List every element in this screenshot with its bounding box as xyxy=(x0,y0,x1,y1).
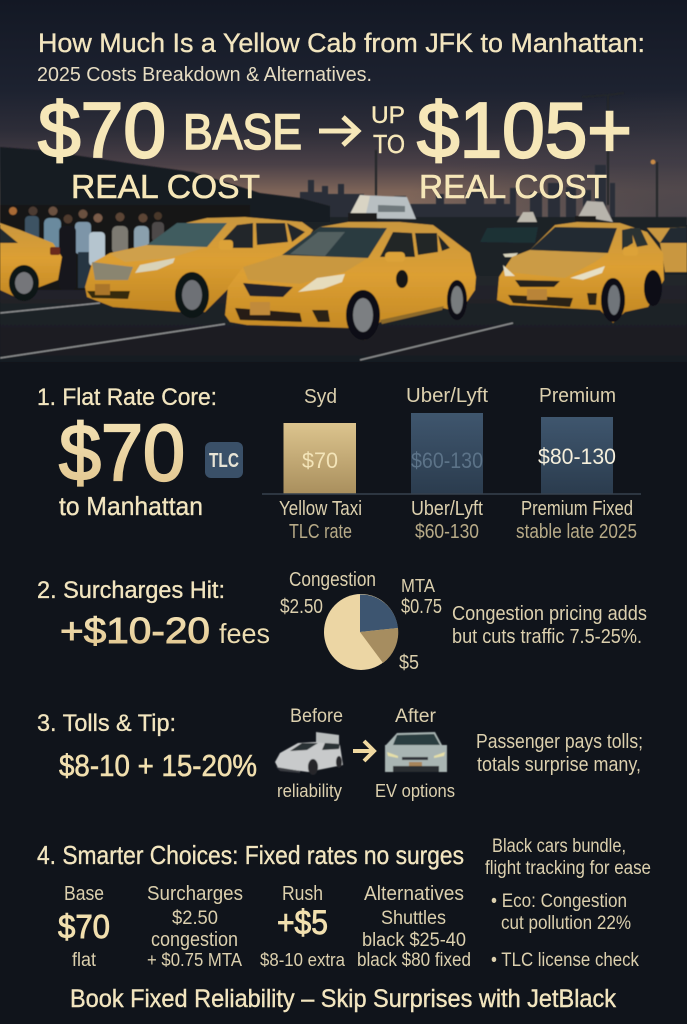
base price: $70 xyxy=(38,86,166,174)
toll amount: $8-10 + 15-20% xyxy=(59,748,257,783)
column: alternatives: Alternatives xyxy=(364,883,464,905)
real cost right: REAL COST xyxy=(419,168,607,205)
ground behind cars xyxy=(0,217,687,277)
main title: How Much Is a Yellow Cab from JFK to Manhattan: xyxy=(38,28,645,58)
column: base: Base xyxy=(64,883,104,905)
column captions: Premium Fixed xyxy=(521,498,633,520)
footer call to action: Book Fixed Reliability – Skip Surprises with JetBlack xyxy=(70,985,616,1013)
bar values xyxy=(302,444,616,473)
column: rush: Rush xyxy=(282,883,323,905)
congestion note: Congestion pricing adds xyxy=(452,603,647,625)
column captions: Yellow Taxi xyxy=(279,498,362,520)
pie chart xyxy=(324,594,398,670)
pie labels xyxy=(280,569,442,674)
column: rush xyxy=(260,883,346,970)
icon: front view car xyxy=(385,732,447,772)
arrow before to after xyxy=(353,741,374,761)
before after labels: After xyxy=(395,706,437,727)
hero title block xyxy=(37,28,645,86)
bar values: $60-130 xyxy=(411,448,483,473)
far right cab xyxy=(647,227,687,272)
heading 4: 4. Smarter Choices: Fixed rates no surges xyxy=(37,840,464,870)
big $70: $70 xyxy=(59,408,185,497)
black cars note xyxy=(485,836,651,879)
panel: 4 smarter choices xyxy=(37,836,651,971)
column titles xyxy=(304,385,616,408)
pie labels: MTA xyxy=(401,576,435,596)
column titles: Premium xyxy=(539,385,616,407)
pie labels: $0.75 xyxy=(401,596,442,618)
fee range: +$10-20 xyxy=(60,610,210,651)
cab second from left xyxy=(85,217,313,318)
bar chart xyxy=(262,385,641,543)
tolls note xyxy=(476,731,643,776)
hero sky xyxy=(0,0,687,225)
congestion note xyxy=(452,603,647,648)
TLC badge: TLC xyxy=(209,450,239,472)
column: rush: +$5 xyxy=(277,904,328,942)
cab on right with roof sign xyxy=(497,201,664,323)
bullet list: cut pollution 22% xyxy=(501,913,631,934)
light poles xyxy=(376,93,657,217)
tolls note: totals surprise many, xyxy=(477,754,641,776)
column titles: Syd xyxy=(304,386,337,408)
column captions: TLC rate xyxy=(289,521,352,543)
fees word: fees xyxy=(219,618,270,649)
before after labels: EV options xyxy=(375,781,455,801)
column: alternatives: Shuttles xyxy=(381,908,446,929)
column: surcharges: Surcharges xyxy=(147,883,243,905)
column titles: Uber/Lyft xyxy=(406,385,488,407)
column captions: Uber/Lyft xyxy=(411,498,483,520)
column: base xyxy=(58,883,110,971)
tolls note: Passenger pays tolls; xyxy=(476,731,643,753)
before after labels: reliability xyxy=(277,781,342,801)
cab far left xyxy=(0,223,62,301)
pie labels: $2.50 xyxy=(280,596,323,618)
black cars note: Black cars bundle, xyxy=(492,836,626,857)
column: base: $70 xyxy=(58,908,110,945)
bullet list: • Eco: Congestion xyxy=(491,891,627,912)
column: rush: $8-10 extra xyxy=(260,950,346,970)
column: base: flat xyxy=(72,950,97,971)
bullet list: • TLC license check xyxy=(491,950,639,971)
column captions xyxy=(279,498,637,543)
hero price comparison xyxy=(38,86,632,205)
black cars note: flight tracking for ease xyxy=(485,858,651,879)
crowd of people xyxy=(25,206,164,290)
road surface xyxy=(0,275,687,362)
before after labels: Before xyxy=(290,706,343,727)
bar values: $80-130 xyxy=(538,444,616,469)
column: alternatives xyxy=(357,883,471,971)
dark background cab xyxy=(467,212,560,276)
hero photo: yellow cabs at JFK at dusk xyxy=(0,93,687,362)
arrow xyxy=(319,117,358,145)
real cost left: REAL COST xyxy=(71,168,260,205)
column: surcharges xyxy=(147,883,243,970)
pie labels: $5 xyxy=(399,652,419,674)
to Manhattan: to Manhattan xyxy=(59,491,203,521)
base label: BASE xyxy=(183,104,302,160)
heading 2: 2. Surcharges Hit: xyxy=(37,577,225,604)
bullet list xyxy=(491,891,639,971)
column: surcharges: $2.50 xyxy=(172,908,218,929)
TLC badge xyxy=(205,442,243,478)
up to label: UP xyxy=(371,102,405,129)
column: alternatives: black $25-40 xyxy=(362,930,466,951)
column captions: stable late 2025 xyxy=(516,521,637,543)
before after labels xyxy=(277,706,455,801)
up to label: TO xyxy=(373,129,405,159)
main cab in front with roof sign xyxy=(225,195,476,340)
column: surcharges: + $0.75 MTA xyxy=(147,950,242,970)
road markings xyxy=(0,303,513,360)
top price: $105+ xyxy=(417,86,632,174)
column captions: $60-130 xyxy=(415,521,479,543)
heading 1: 1. Flat Rate Core: xyxy=(37,384,217,411)
heading 3: 3. Tolls & Tip: xyxy=(37,710,176,737)
icon: white car side view xyxy=(275,732,343,775)
column: alternatives: black $80 fixed xyxy=(357,950,471,971)
up to label xyxy=(371,102,405,159)
panel: 1 flat rate core xyxy=(37,384,641,543)
terminal building xyxy=(0,147,330,222)
bar values: $70 xyxy=(302,448,338,473)
skyline xyxy=(300,165,615,225)
pie labels: Congestion xyxy=(289,569,376,591)
congestion note: but cuts traffic 7.5-25%. xyxy=(452,626,642,648)
bar premium xyxy=(541,417,613,494)
bar uber lyft xyxy=(411,413,483,494)
panel: 3 tolls and tip xyxy=(37,706,643,801)
column: surcharges: congestion xyxy=(151,929,238,951)
panel: 2 surcharges xyxy=(37,569,647,674)
bar yellow taxi xyxy=(284,423,356,494)
subtitle: 2025 Costs Breakdown & Alternatives. xyxy=(37,64,372,86)
